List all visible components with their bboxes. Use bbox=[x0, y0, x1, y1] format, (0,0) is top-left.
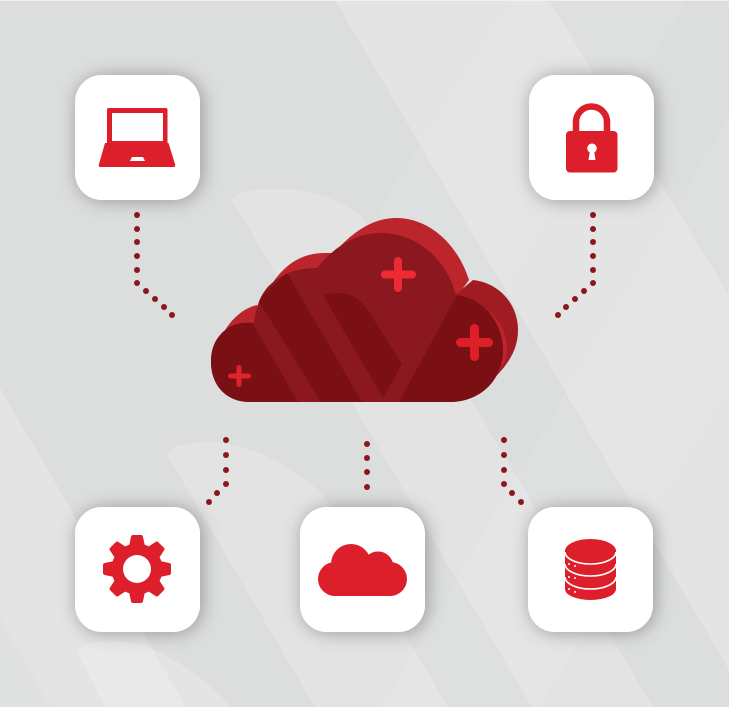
plus: left bbox=[230, 368, 248, 384]
connector: database to cloud bbox=[501, 437, 524, 505]
card: lock bbox=[529, 75, 654, 200]
icon: gear bbox=[105, 537, 169, 601]
connector: laptop to cloud bbox=[134, 212, 175, 318]
card: database bbox=[528, 507, 653, 632]
connector: lock to cloud bbox=[555, 212, 596, 318]
connector: small cloud to cloud bbox=[364, 441, 370, 490]
icon: padlock bbox=[566, 106, 618, 172]
icon: cloud bbox=[318, 544, 407, 596]
connector: gear to cloud bbox=[206, 437, 229, 505]
dark stripes bbox=[200, 273, 510, 402]
cloud front face bbox=[211, 233, 503, 402]
icon: database bbox=[565, 539, 616, 600]
icon: laptop bbox=[99, 108, 175, 167]
card: gear bbox=[75, 507, 200, 632]
plus: right bbox=[460, 328, 488, 356]
central cloud bbox=[200, 218, 518, 405]
card: cloud bbox=[300, 507, 425, 632]
cloud back layer bbox=[224, 218, 518, 398]
card: laptop bbox=[75, 75, 200, 200]
plus: top bbox=[385, 261, 412, 288]
